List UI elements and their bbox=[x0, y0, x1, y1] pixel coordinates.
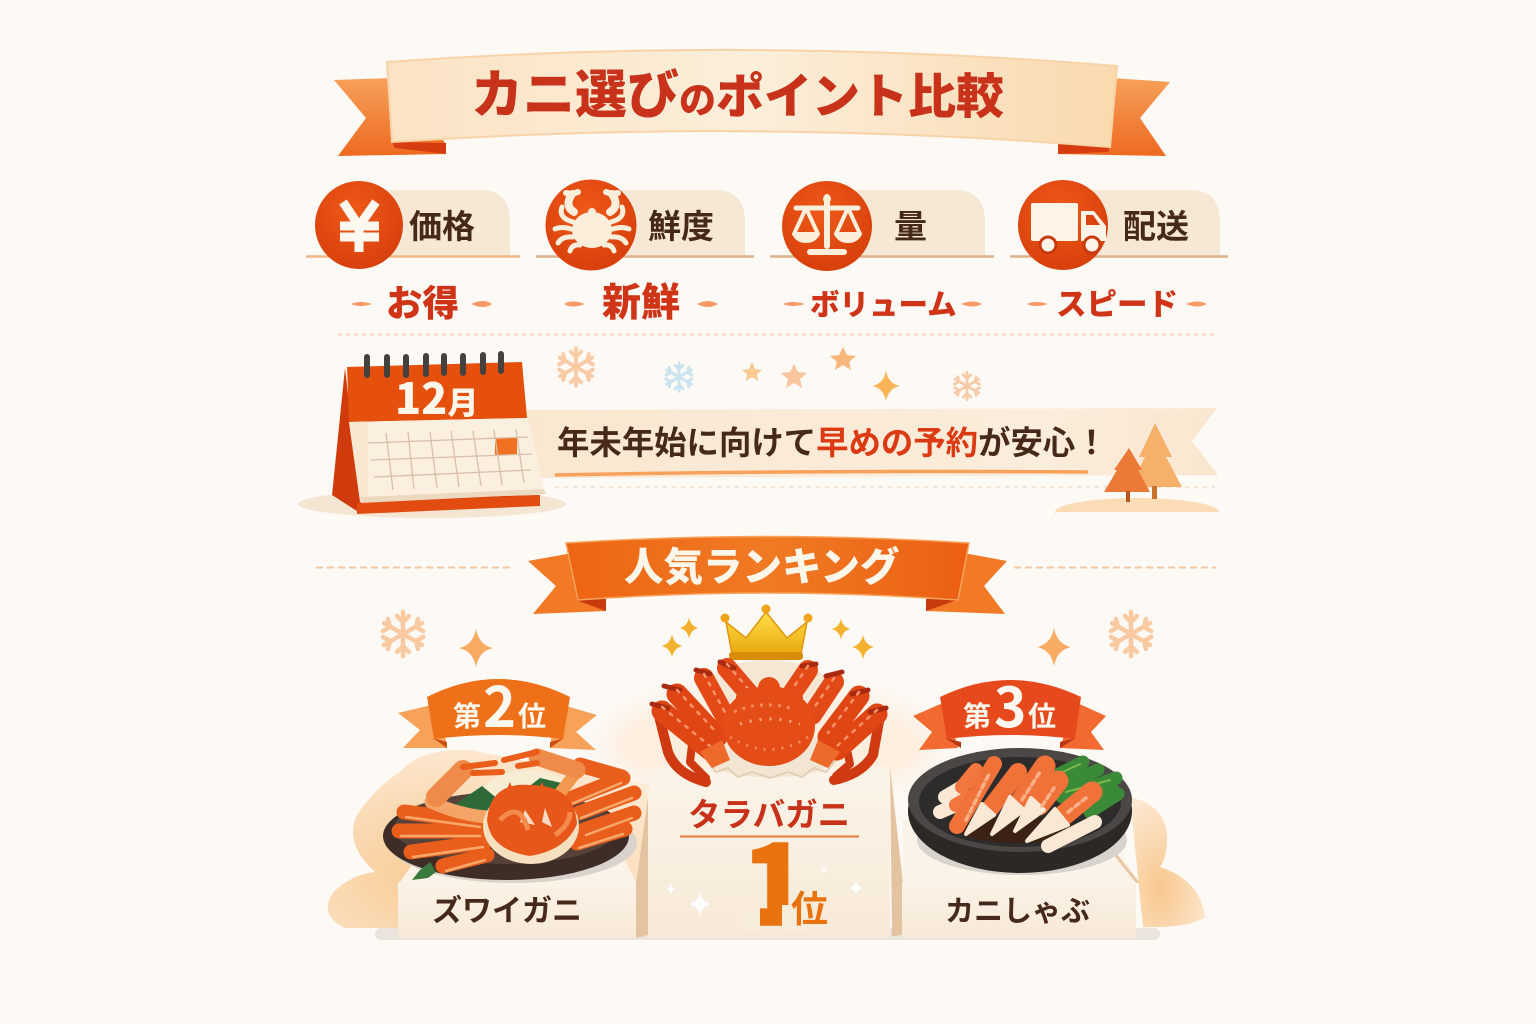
ranking right tail bbox=[926, 552, 1007, 614]
second place label: 2 bbox=[483, 663, 516, 744]
label: volume: 量 bbox=[894, 200, 927, 248]
podium shadow bbox=[375, 928, 1160, 940]
ranking divider dashes bbox=[316, 566, 1216, 568]
icon: trees on hill bbox=[1055, 423, 1220, 528]
dish: snow crab plate bbox=[383, 752, 637, 883]
icon: truck bbox=[1018, 180, 1108, 270]
dish: king crab bbox=[652, 660, 886, 782]
ranking left tail bbox=[528, 552, 606, 614]
keyword: speed: スピード bbox=[1056, 280, 1178, 324]
left claw arm bbox=[431, 802, 487, 817]
second place label: 位 bbox=[518, 695, 546, 735]
label: price: 価格 bbox=[409, 200, 475, 248]
icon: calendar bbox=[298, 354, 566, 518]
calendar month: 12月 bbox=[395, 365, 478, 427]
second place name: ズワイガニ bbox=[432, 886, 582, 930]
keyword: volume: ボリューム bbox=[810, 282, 957, 324]
first place step bbox=[648, 767, 890, 957]
ranking ribbon bbox=[528, 536, 1007, 614]
second place label: 第 bbox=[453, 695, 481, 735]
second place ribbon bbox=[398, 663, 597, 750]
thick legs bbox=[704, 668, 834, 720]
ribbon right tail bbox=[1058, 78, 1170, 156]
curled legs bbox=[659, 716, 880, 782]
comparison point 3: volume bbox=[770, 181, 994, 324]
right claw arm bbox=[560, 770, 578, 793]
winter decorations bbox=[559, 347, 979, 401]
third place ribbon bbox=[913, 663, 1106, 750]
third place label: 第 bbox=[963, 695, 991, 735]
title text: カニ選びのポイント比較 bbox=[471, 53, 1004, 128]
first place rank suffix: 位 bbox=[791, 879, 828, 933]
ranking ribbon body bbox=[566, 536, 969, 600]
third place label: 位 bbox=[1028, 695, 1056, 735]
drops bbox=[783, 302, 982, 306]
drops bbox=[1027, 302, 1207, 306]
ribbon left fold bbox=[392, 142, 446, 154]
label: freshness: 鮮度 bbox=[648, 200, 714, 248]
ribbon left tail bbox=[334, 78, 446, 156]
drops bbox=[351, 301, 492, 307]
ranking heading: 人気ランキング bbox=[624, 536, 900, 593]
podium bbox=[375, 767, 1160, 957]
third place step bbox=[890, 767, 1140, 938]
title ribbon bbox=[334, 50, 1170, 156]
dish: crab stick bowl bbox=[908, 748, 1132, 875]
icon: yen bbox=[315, 181, 403, 269]
drops bbox=[564, 301, 718, 307]
keyword: value: お得 bbox=[386, 274, 459, 327]
ribbon right fold bbox=[1058, 143, 1110, 154]
comparison point 1: price bbox=[306, 181, 520, 327]
label: delivery: 配送 bbox=[1123, 200, 1189, 248]
crown bbox=[720, 604, 812, 660]
icon: crab bbox=[546, 180, 636, 270]
ribbon body bbox=[387, 50, 1117, 147]
icon: scale bbox=[782, 181, 872, 271]
keyword: fresh: 新鮮 bbox=[602, 272, 680, 328]
banner: early reservation bbox=[520, 408, 1218, 487]
first place rank: 1 bbox=[742, 797, 809, 957]
comparison point 4: delivery bbox=[1010, 180, 1228, 324]
third place label: 3 bbox=[994, 663, 1026, 743]
background blobs bbox=[328, 690, 1205, 928]
ranking sparkles and snow bbox=[383, 612, 1151, 667]
banner text: 年未年始に向けて早めの予約が安心！ bbox=[557, 417, 1108, 464]
comparison point 2: freshness bbox=[536, 180, 754, 328]
podium sparkles bbox=[666, 866, 863, 916]
third place name: カニしゃぶ bbox=[945, 888, 1090, 930]
second place step bbox=[398, 768, 652, 938]
first place name: タラバガニ bbox=[688, 789, 850, 836]
